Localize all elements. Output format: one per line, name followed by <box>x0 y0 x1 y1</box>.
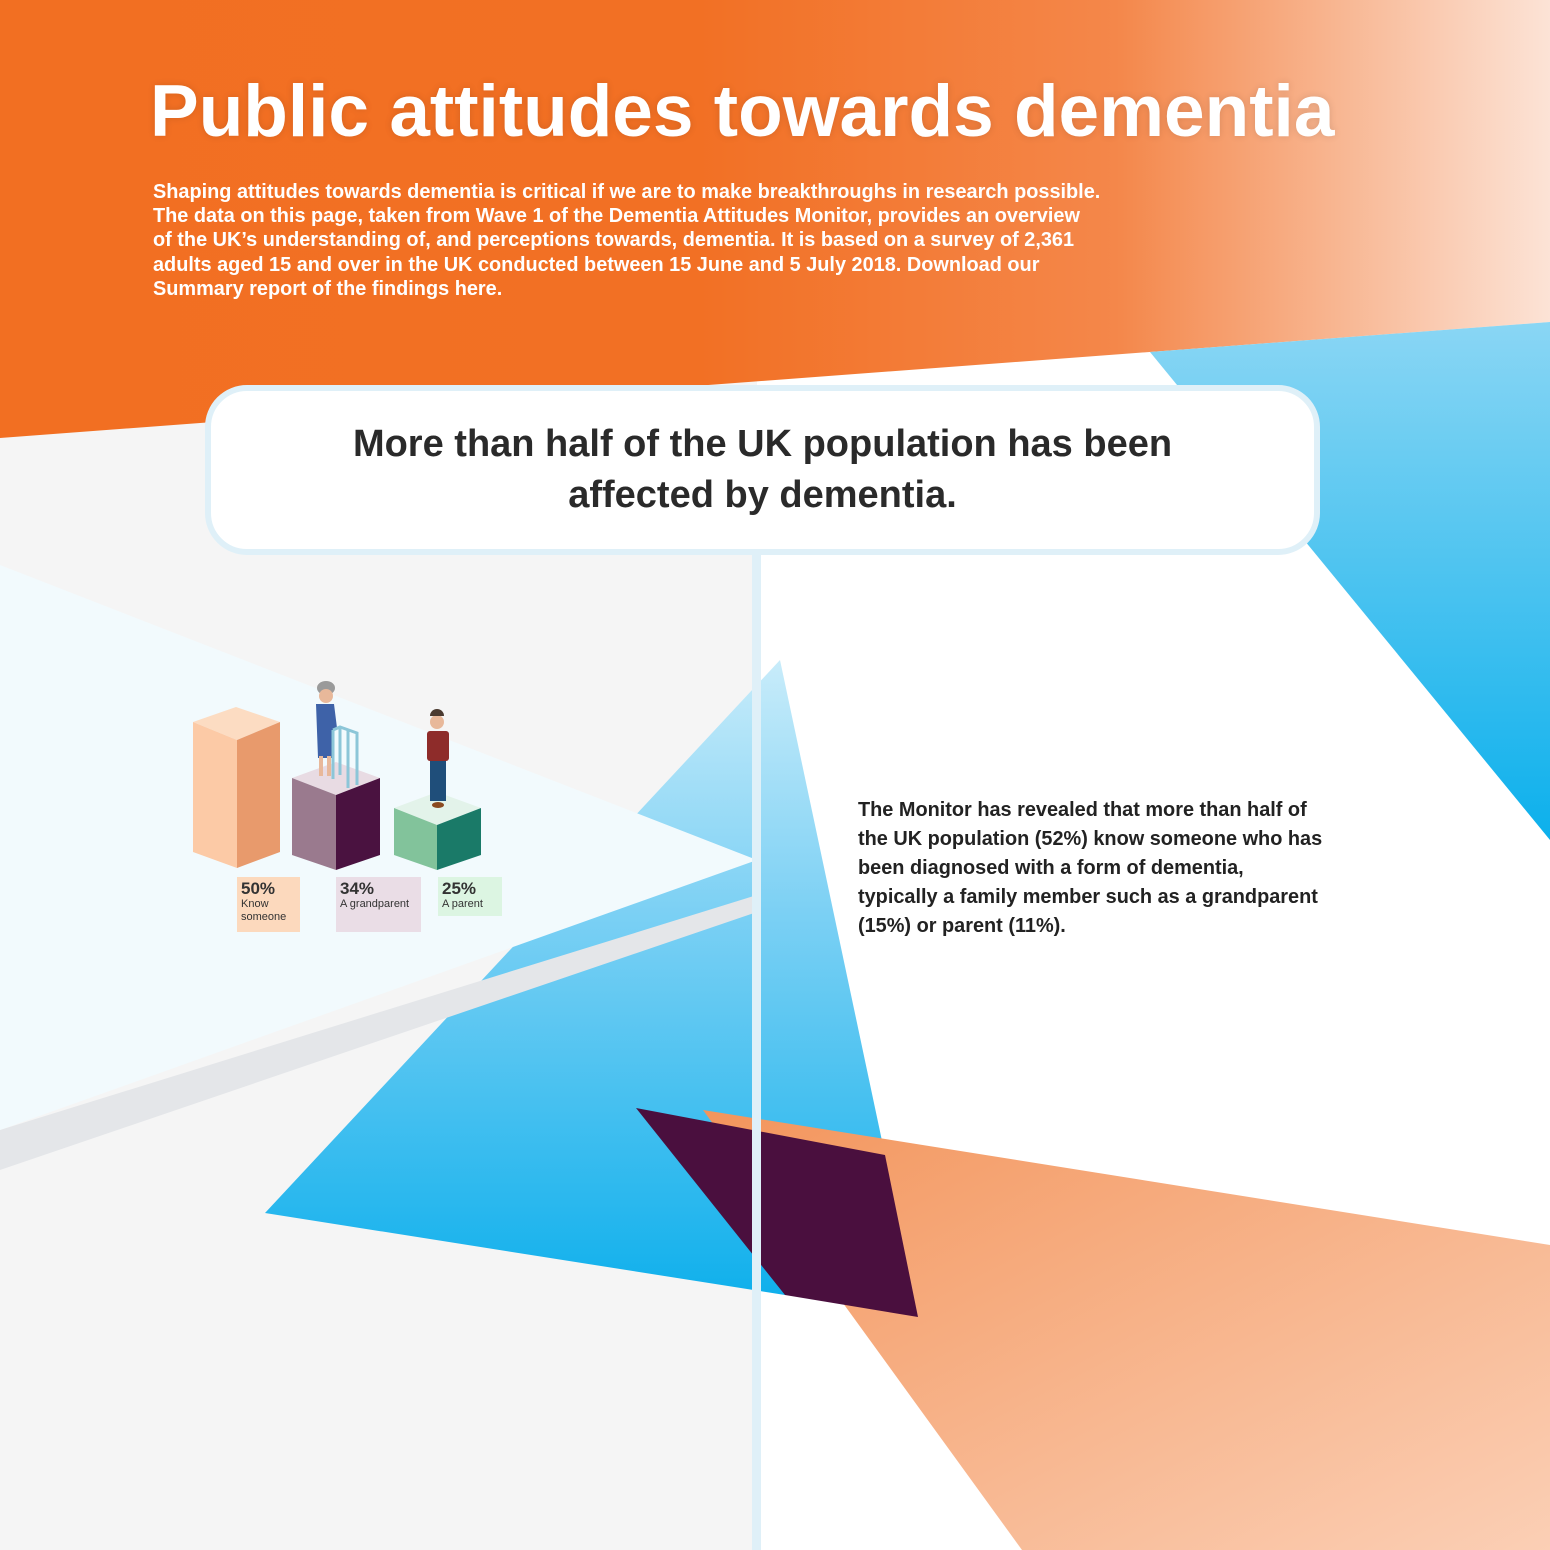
intro text: of the UK’s understanding of, and perceptions towards, dementia. It is based on a survey of 2,361 <box>153 229 1074 251</box>
label: 25% <box>438 877 502 916</box>
title: Public attitudes towards dementia <box>150 71 1334 152</box>
icon: man <box>427 709 449 808</box>
intro text <box>153 181 1100 300</box>
body text right: typically a family member such as a grandparent <box>858 886 1318 908</box>
body text right: (15%) or parent (11%). <box>858 915 1066 937</box>
label: 50%: someone <box>241 911 286 923</box>
intro text: Summary report of the findings here. <box>153 278 502 300</box>
label: 50%: 50% <box>241 879 275 898</box>
label: 34% <box>336 877 421 932</box>
label: 34%: A grandparent <box>340 898 409 910</box>
body text right: the UK population (52%) know someone who has <box>858 828 1322 850</box>
body text right <box>858 799 1322 937</box>
headline box: affected by dementia. <box>568 474 957 516</box>
intro text: adults aged 15 and over in the UK conducted between 15 June and 5 July 2018. Download our <box>153 254 1039 276</box>
body text right: The Monitor has revealed that more than half of <box>858 799 1307 821</box>
label: 25%: A parent <box>442 898 483 910</box>
bar chart <box>193 681 502 932</box>
intro text: Shaping attitudes towards dementia is critical if we are to make breakthroughs in research possible. <box>153 181 1100 203</box>
bar: grandparent <box>292 762 380 870</box>
bar: know someone <box>193 707 280 868</box>
bar: parent <box>394 792 481 870</box>
label: 50% <box>237 877 300 932</box>
intro text: The data on this page, taken from Wave 1 of the Dementia Attitudes Monitor, provides an overview <box>153 205 1080 227</box>
label: 25%: 25% <box>442 879 476 898</box>
label: 50%: Know <box>241 898 269 910</box>
icon: grandmother with walker <box>316 681 357 788</box>
label: 34%: 34% <box>340 879 374 898</box>
headline box <box>205 385 1320 555</box>
body text right: been diagnosed with a form of dementia, <box>858 857 1244 879</box>
headline box: More than half of the UK population has been <box>353 423 1172 465</box>
